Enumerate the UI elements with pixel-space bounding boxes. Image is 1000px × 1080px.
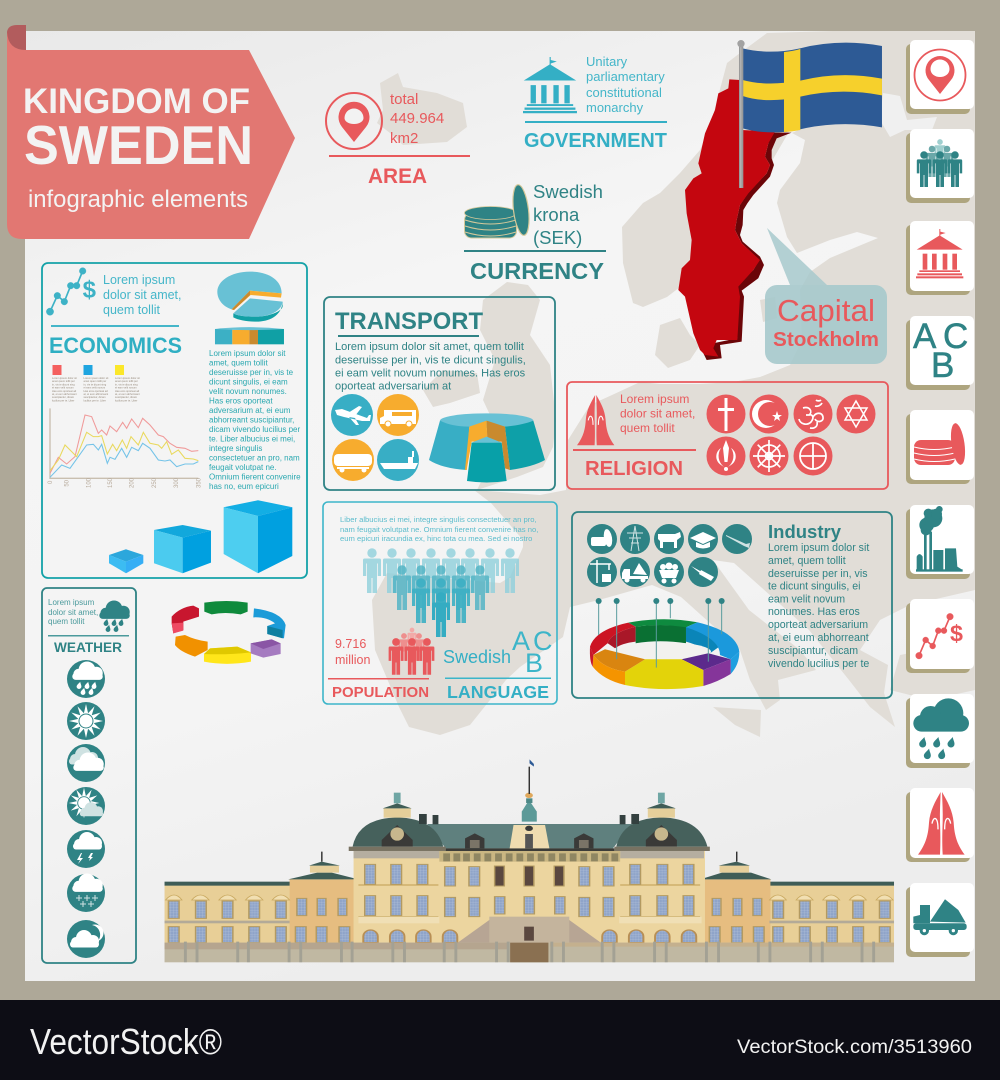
weather text: Lorem ipsum [48,598,95,607]
white sea [880,93,937,137]
line chart: 200 [130,477,136,488]
religion text: dolor sit amet, [620,406,695,420]
language name: Swedish [443,647,511,667]
government text: Unitary [586,54,628,69]
panel: industry [572,512,892,698]
government text: parliamentary [586,69,665,84]
language letters: C [533,626,552,656]
background map of northern Europe [372,31,975,737]
economics paragraph: dicam vivendo lucilius per [209,425,300,434]
chart legend: in, vis te dicunt sing [115,382,138,386]
icon: ship [377,439,419,481]
population text: nam feugait volutpat ne. Omnium fierent convenire has no, [340,525,538,534]
small segmented ring [172,601,286,664]
icon: praying hands [577,395,614,445]
economics paragraph: has no, eum epicuri [209,482,279,491]
economics paragraph: consectetuer an pro, nam [209,454,300,462]
population figure: million [335,653,370,667]
icon: dump truck [620,557,650,587]
title: Kingdom of: KINGDOM OF [23,82,250,121]
icon: khanda [706,436,746,476]
footer bar [0,1000,1000,1080]
religion heading: RELIGION [585,458,683,480]
capital name: Stockholm [773,328,879,351]
icon: dharma wheel [750,436,788,476]
industry text: nonumes. Has eros [768,606,860,618]
icon: graduation cap [688,524,718,554]
icon: crane [587,557,617,587]
weather text: dolor sit amet, [48,608,98,617]
capital callout [765,228,887,364]
language heading: LANGUAGE [447,682,549,702]
capital label: Capital [777,293,875,328]
economics paragraph: Lorem ipsum dolor sit [209,349,286,358]
icon: location pin tile [914,50,966,100]
language letters: B [525,648,543,678]
icon: red people [389,628,434,675]
panel: transport [324,297,555,490]
icon: rain cloud [99,600,130,632]
icon: pylon [620,524,650,554]
icon: area pin [326,93,382,149]
chart legend: Lorem ipsum dolor sit [52,376,77,380]
industry text: vivendo lucilius per te [768,658,869,670]
economics intro text: quem tollit [103,303,160,317]
icon: moon and cloud [67,920,105,958]
icon: star of david [836,394,876,434]
icon: snow [67,873,105,912]
icon: hands tile [918,792,965,855]
currency name: Swedish [533,181,603,202]
chart legend: suscipiantur, dicam [52,395,74,399]
line chart: 0 [48,480,54,484]
chart legend: Has eros oporteat ad [84,389,108,393]
sweden map [678,79,792,360]
bar cubes [109,500,292,573]
chart legend: at, ei eum abhorreant [84,392,108,396]
government text: constitutional [586,85,662,100]
chart legend: suscipiantur, dicam [115,395,137,399]
chart legend: at, ei eum abhorreant [115,392,140,396]
icon: letters tile: C [943,317,968,356]
icon: economy tile: $ [950,621,963,647]
icon: sun and cloud [67,787,105,825]
economics paragraph: velit novum nonumes. [209,387,287,396]
line chart: 250 [152,477,158,488]
chart legend: ei eam velit novum [115,386,137,390]
chart legend: Lorem ipsum dolor sit [115,376,140,380]
industry text: deseruisse per in, vis [768,568,868,580]
transport text: Lorem ipsum dolor sit amet, quem tollit [335,341,524,353]
religion text: Lorem ipsum [620,392,689,406]
line chart: 350 [196,477,202,488]
icon: economy trend: $ [83,277,96,304]
panel: weather [42,588,136,963]
currency name: krona [533,204,580,225]
chart legend: amet quem tollit per [84,379,106,383]
economics paragraph: abhorreant suscipiantur, [209,416,294,424]
economics paragraph: amet, quem tollit [209,358,268,368]
population figure: 9.716 [335,637,366,651]
palace illustration [165,759,894,962]
economics paragraph: feugait volutpat ne. [209,463,277,472]
icon: crescent [750,394,788,434]
line chart: 300 [174,477,180,488]
currency name: (SEK) [533,227,582,248]
icon: coins tile [914,422,967,466]
icon: mine cart [654,557,684,587]
icon: economy trend [46,268,96,315]
icon: truck tile [913,899,967,935]
government heading: GOVERNMENT [524,130,667,152]
drum chart [429,413,545,482]
economics intro text: dolor sit amet, [103,288,182,302]
icon: coal [587,524,617,554]
subtitle: infographic elements [28,187,248,213]
icon: airplane [331,394,373,436]
chart legend: ei eam velit novum [84,386,105,390]
chart legend: amet quem tollit per [115,379,138,383]
pie chart 3d [217,272,283,322]
panel: population and language [323,502,557,704]
people pyramid [363,548,519,637]
chart legend: Has eros oporteat ad [115,389,140,393]
icon: rain [67,660,105,698]
icon: bus [377,394,419,436]
transport text: deseruisse per in, vis te dicunt singulis, [335,354,526,366]
economics paragraph: deseruisse per in, vis te [209,368,294,377]
economics paragraph: te. Liber albucius ei mei, [209,434,295,444]
chart legend: at, ei eum abhorreant [52,392,77,396]
icon: letters tile: B [931,346,954,385]
area figures: total [390,91,418,108]
industry heading: Industry [768,521,842,542]
icon: overcast [67,744,105,782]
icon: cross [706,394,746,434]
icon: people tile [917,139,962,187]
industry text: oporteat adversarium [768,619,868,631]
industry text: at, ei eum abhorreant [768,632,869,644]
chart legend: lucilius per te. Liber [115,398,137,402]
chart legend: lucilius per te. Liber [84,398,106,402]
icon: sun [67,702,105,740]
panel: economics [42,263,307,578]
icon: economy tile [916,613,963,659]
weather heading: WEATHER [54,640,122,655]
population text: Liber albucius ei mei, integre singulis consectetuer an pro, [340,515,537,524]
industry text: amet, quem tollit [768,555,846,567]
line chart: 100 [86,477,92,488]
icon: government tile [916,229,963,278]
chart legend: suscipiantur, dicam [84,395,106,399]
chart legend [52,365,140,402]
footer logo: VectorStock® [30,1021,222,1062]
icon: sun cross [794,436,832,476]
transport heading: TRANSPORT [335,308,483,335]
religion text: quem tollit [620,421,675,435]
area figures: km2 [390,130,418,147]
currency block [464,181,606,284]
panel: religion [567,382,888,489]
icon: coins [464,184,532,238]
language letters: A [512,626,530,656]
icon: om [794,394,832,434]
transport text: oporteat adversarium at [335,380,451,392]
industry text: suscipiantur, dicam [768,645,858,657]
chart legend: in, vis te dicunt sing [84,382,107,386]
government block [523,54,667,152]
ring chart with pins [590,598,739,689]
line chart: 50 [65,479,71,487]
icon: rifle [722,524,752,554]
line chart: 150 [108,477,114,488]
sidebar tiles [906,40,974,957]
area block [326,91,470,188]
economics paragraph: Omnium fierent convenire [209,472,301,482]
economics paragraph: integre singulis [209,444,262,453]
icon: government building [523,57,577,113]
area figures: 449.964 [390,110,444,127]
icon: thunderstorm [67,830,105,868]
chart legend: ei eam velit novum [52,386,74,390]
chart legend: lucilius per te. Liber [52,398,74,402]
footer url: VectorStock.com/3513960 [737,1037,972,1058]
swedish flag [737,40,882,188]
economics paragraph: adversarium at, ei eum [209,406,291,415]
icon: syringe [688,557,718,587]
chart legend: amet quem tollit per [52,379,75,383]
industry text: te dicunt singulis, ei [768,580,860,592]
icon: cloud tile [913,698,969,759]
title banner [7,25,295,239]
title: Sweden: SWEDEN [24,114,253,176]
weather text: quem tollit [48,617,85,626]
icon: tanker wagon [332,439,374,481]
industry text: Lorem ipsum dolor sit [768,542,869,554]
drum chart [215,327,284,344]
chart legend: Has eros oporteat ad [52,389,77,393]
transport text: ei eam velit novum nonumes. Has eros [335,368,526,380]
icon: factory tile [916,506,963,572]
currency heading: CURRENCY [470,258,604,284]
area heading: AREA [368,165,427,188]
line chart [48,408,202,488]
economics heading: ECONOMICS [49,333,182,358]
industry text: eam velit novum [768,594,845,606]
chart legend: in, vis te dicunt sing [52,382,75,386]
government text: monarchy [586,100,644,115]
economics intro text: Lorem ipsum [103,273,175,287]
icon: letters tile: A [913,317,937,356]
economics paragraph: dicunt singulis, ei eam [209,378,288,386]
chart legend: Lorem ipsum dolor sit [84,376,109,380]
icon: cow [654,524,684,554]
population text: eum epicuri iracundia ex, hinc tota cu mea. Sed ei nostro [340,534,532,543]
economics paragraph: Has eros oporteat [209,396,273,406]
population heading: POPULATION [332,685,429,701]
